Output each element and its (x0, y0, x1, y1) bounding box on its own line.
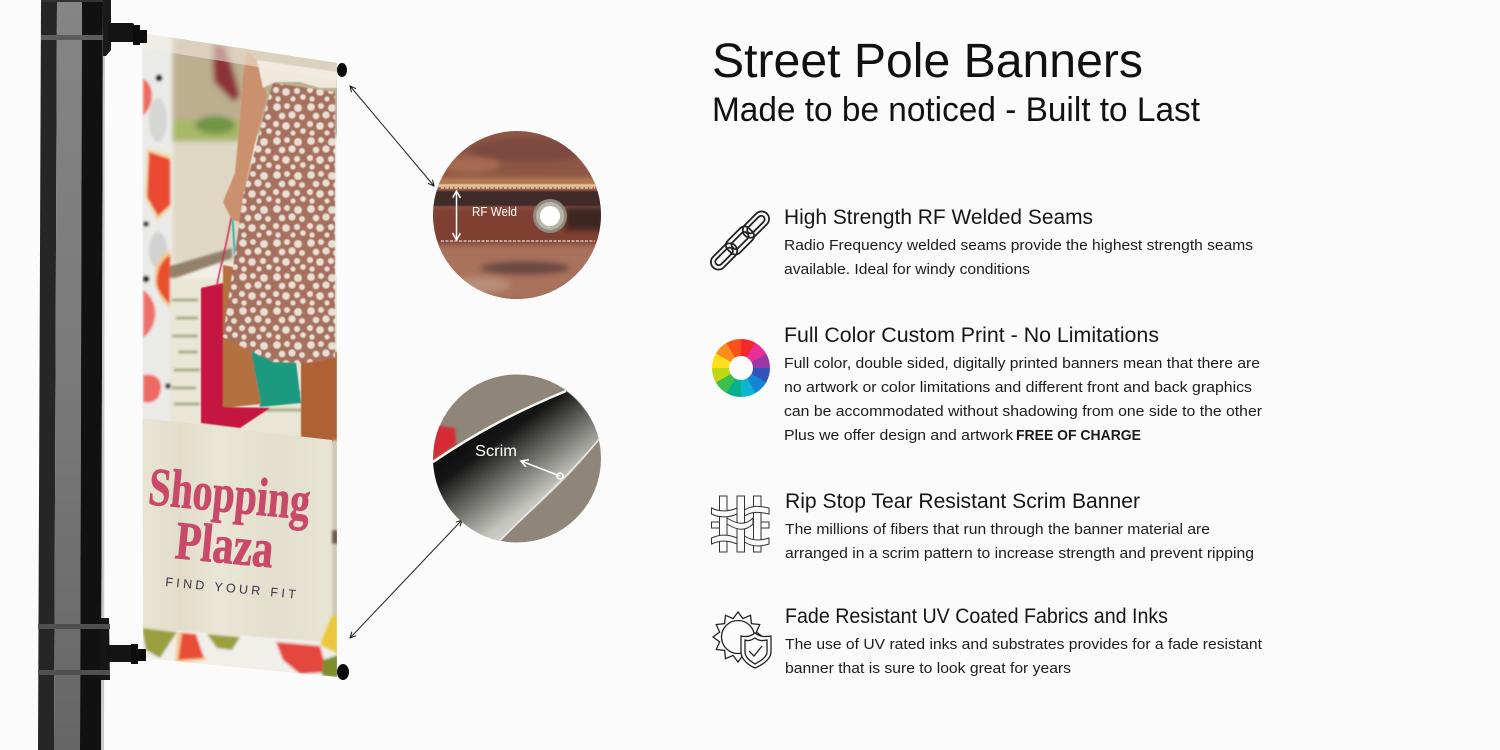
subtitle: Made to be noticed - Built to Last (712, 91, 1201, 129)
description: can be accommodated without shadowing from one side to the other (784, 403, 1262, 420)
heading: Fade Resistant UV Coated Fabrics and Inks (785, 605, 1168, 628)
description: no artwork or color limitations and different front and back graphics (784, 379, 1252, 396)
street pole with mounting brackets (38, 0, 134, 750)
description: Radio Frequency welded seams provide the highest strength seams (784, 237, 1253, 254)
banner headline (141, 456, 313, 582)
RF weld label: RF Weld (472, 205, 517, 219)
description: FREE OF CHARGE (1016, 427, 1141, 444)
banner top sleeve highlight (171, 38, 337, 80)
description: available. Ideal for windy conditions (784, 261, 1030, 278)
description: The millions of fibers that run through the banner material are (785, 521, 1210, 538)
grommet (533, 199, 567, 233)
description: Full color, double sided, digitally printed banners mean that there are (784, 355, 1260, 372)
heading: Rip Stop Tear Resistant Scrim Banner (785, 490, 1140, 513)
banner tagline: FIND YOUR FIT (165, 575, 297, 602)
description: Plus we offer design and artwork (784, 427, 1014, 444)
heading: Full Color Custom Print - No Limitations (784, 324, 1159, 347)
feature: RF welded seams (707, 206, 1253, 278)
feature: UV coated (713, 605, 1263, 677)
detail circle: scrim (430, 372, 605, 547)
bottom banner rod flange (131, 644, 146, 664)
feature: rip stop scrim (712, 490, 1254, 562)
description (785, 521, 1254, 562)
heading: High Strength RF Welded Seams (784, 206, 1093, 229)
description (784, 237, 1253, 278)
seam stitch lines (441, 188, 595, 241)
icon: sun with shield (713, 612, 771, 668)
banner photo background (152, 34, 337, 656)
bottom banner rod end cap (337, 664, 349, 680)
scrim arrow (521, 461, 563, 479)
description (784, 355, 1262, 444)
callout arrow: top (350, 86, 434, 186)
icon: color wheel (713, 340, 769, 396)
banner bottom fruit strip (142, 440, 338, 680)
banner cream title panel (142, 418, 332, 643)
banner headline: Plaza (173, 510, 276, 579)
icon: woven scrim (712, 496, 769, 552)
icon: chain (707, 208, 773, 273)
banner on pole (131, 25, 349, 680)
top banner rod end cap (337, 63, 347, 77)
detail circle: RF weld (430, 128, 605, 303)
description (785, 636, 1263, 677)
top banner rod flange (133, 25, 147, 45)
shopper and bags (201, 50, 337, 442)
weld width arrow (456, 191, 458, 240)
description: banner that is sure to look great for years (785, 660, 1071, 677)
callout arrow: bottom (350, 520, 462, 638)
scrim label: Scrim (475, 443, 517, 460)
feature: full color print (713, 324, 1262, 444)
description: arranged in a scrim pattern to increase strength and prevent ripping (785, 545, 1254, 562)
title: Street Pole Banners (712, 35, 1143, 88)
description: The use of UV rated inks and substrates provides for a fade resistant (785, 636, 1263, 653)
banner headline: Shopping (146, 456, 313, 532)
